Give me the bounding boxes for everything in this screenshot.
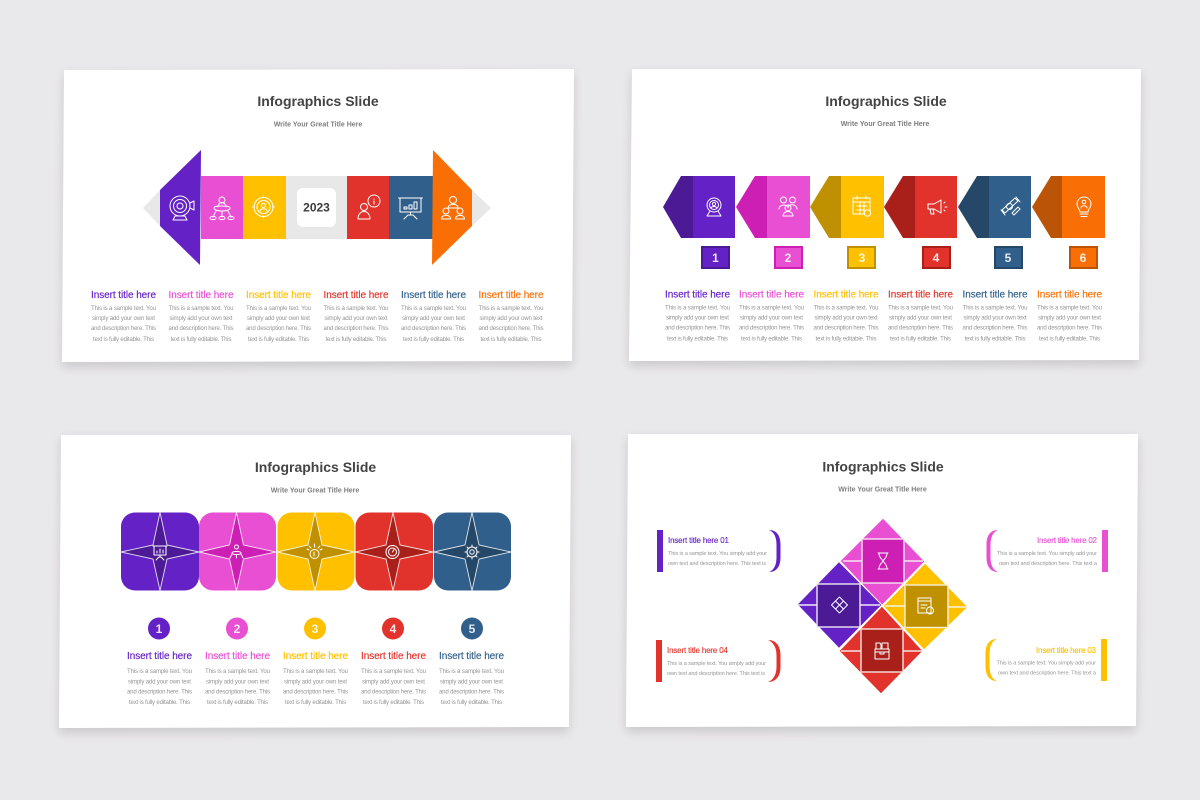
panel: slide 2 hexagon steps <box>629 69 1141 366</box>
callout 02: Insert title here 02 <box>1037 536 1098 545</box>
star tile 3 <box>278 512 354 590</box>
slide 2 column 6: text is fully editable. This <box>1039 336 1100 342</box>
slide 1 column 4: simply add your own text <box>324 315 388 322</box>
slide 2 column 3 <box>814 290 879 342</box>
slide 2 column 3: text is fully editable. This <box>816 336 876 342</box>
diamond quadrant: yellow <box>883 563 968 650</box>
step 5 arrow <box>958 176 1031 238</box>
icon: presentation board <box>398 198 422 219</box>
slide 2 column 1 <box>665 290 730 342</box>
icon: group of people <box>779 197 797 216</box>
slide 3 column 3 <box>283 651 348 706</box>
number circle 1 <box>148 618 170 640</box>
slide 1 column 5: simply add your own text <box>402 315 465 322</box>
slide 1 column 1: simply add your own text <box>92 315 155 322</box>
slide 3 column 5: Insert title here <box>439 651 504 662</box>
slide 2 column 4: simply add your own text <box>889 314 952 322</box>
slide 3 column 1: text is fully editable. This <box>129 699 190 706</box>
panel: slide 4 diamond <box>626 434 1138 732</box>
callout 03: own text and description here. This text a <box>998 670 1097 676</box>
number badge 4: 4 <box>933 251 940 265</box>
slide 1 column 6: and description here. This <box>478 325 544 332</box>
slide 3 column 4: simply add your own text <box>362 678 425 686</box>
slide 1 background <box>62 69 574 362</box>
callout 02: own text and description here. This text a <box>999 561 1098 567</box>
slide 1 column 4: and description here. This <box>324 325 388 332</box>
step 4 arrow <box>884 176 957 238</box>
icon: hourglass <box>878 553 888 569</box>
slide 1 column 5 <box>401 290 466 343</box>
icon: target camera <box>170 196 194 220</box>
star tile 2 <box>199 512 276 590</box>
slide 3 subtitle: Write Your Great Title Here <box>271 488 359 494</box>
slide 1 column 3: and description here. This <box>246 325 311 332</box>
diamond quadrant: pink <box>840 518 925 606</box>
slide 1 column 3: text is fully editable. This <box>248 336 309 343</box>
slide 4 subtitle: Write Your Great Title Here <box>838 486 927 494</box>
slide 1 column 3 <box>246 290 311 343</box>
star tile 1 <box>121 512 199 590</box>
number badge 6 <box>1070 247 1097 268</box>
slide 1 column 3: This is a sample text. You <box>246 305 311 312</box>
slide 1 column 6: text is fully editable. This <box>480 336 542 343</box>
slide 3 column 3: This is a sample text. You <box>283 668 348 675</box>
slide 3 background <box>59 435 571 728</box>
slide 2 column 6 <box>1037 290 1102 342</box>
slide 2 column 1: text is fully editable. This <box>667 336 728 342</box>
icon: document info <box>918 598 934 614</box>
slide 1 title: Infographics Slide <box>257 93 379 109</box>
slide 1 column 5: text is fully editable. This <box>403 336 464 343</box>
slide 1 column 3: Insert title here <box>246 290 311 301</box>
arrow timeline <box>143 150 491 265</box>
slide 2 column 3: and description here. This <box>814 324 878 332</box>
callout 02: This is a sample text. You simply add your <box>997 551 1097 557</box>
slide 3 column 3: and description here. This <box>283 688 348 696</box>
diamond quadrant: red <box>839 606 923 694</box>
slide 3 column 1: simply add your own text <box>128 678 191 686</box>
slide 1 column 2: simply add your own text <box>170 315 233 322</box>
number circle 1: 1 <box>156 622 163 636</box>
slide 1 column 4: Insert title here <box>324 290 389 301</box>
slide 3 column 4: Insert title here <box>361 651 426 662</box>
icon: megaphone <box>928 200 947 214</box>
slide 1 column 2: and description here. This <box>168 325 234 332</box>
step 6 arrow <box>1032 176 1105 238</box>
icon: hierarchy person <box>210 197 234 220</box>
callout 04: Insert title here 04 <box>667 646 729 655</box>
callout 03 <box>986 639 1107 681</box>
callout 02 <box>986 530 1108 572</box>
slide 1 column 1 <box>91 290 156 343</box>
icon: gear <box>465 545 479 559</box>
slide 2 column 6: and description here. This <box>1037 324 1102 332</box>
number circle 3: 3 <box>312 622 319 636</box>
callout 04: own text and description here. This text is <box>667 671 765 677</box>
slide 3 column 2: simply add your own text <box>206 678 269 686</box>
slide 1 column 6: simply add your own text <box>480 315 543 322</box>
step 3 arrow <box>810 176 884 238</box>
panel: slide 3 star tiles <box>59 435 571 733</box>
slide 3 column 3: text is fully editable. This <box>285 699 346 706</box>
slide 1 column 2: text is fully editable. This <box>170 336 232 343</box>
slide 1 column 2: This is a sample text. You <box>168 305 234 312</box>
year badge <box>297 188 336 227</box>
icon: presentation <box>153 546 167 560</box>
callout 04: This is a sample text. You simply add your <box>667 661 766 667</box>
slide 2 column 4 <box>888 290 953 342</box>
slide 2 column 4: This is a sample text. You <box>888 304 953 312</box>
slide 3 column 3: simply add your own text <box>284 678 347 686</box>
icon: coin burst <box>307 544 322 558</box>
number circle 3 <box>304 618 326 640</box>
slide 2 column 5: This is a sample text. You <box>962 304 1028 312</box>
step 2 arrow <box>736 176 810 238</box>
slide 2 column 5 <box>962 290 1028 342</box>
icon: calendar clock <box>853 196 871 216</box>
slide 3 column 1: and description here. This <box>127 688 192 696</box>
diamond quadrant: purple <box>797 562 882 648</box>
slide 2 column 4: text is fully editable. This <box>890 336 951 342</box>
slide 2 column 2: This is a sample text. You <box>739 304 804 312</box>
slide 1 column 2: Insert title here <box>168 290 234 301</box>
slide 3 column 5: and description here. This <box>439 688 504 696</box>
callout 01: Insert title here 01 <box>668 536 730 545</box>
icon: pinwheel <box>832 597 848 613</box>
slide 1 column 6: This is a sample text. You <box>478 305 544 312</box>
icon: gauge <box>386 546 399 558</box>
number badge 6: 6 <box>1080 251 1087 265</box>
slide 2 column 3: This is a sample text. You <box>814 304 878 312</box>
slide 3 column 5: simply add your own text <box>440 678 503 686</box>
slide 3 title: Infographics Slide <box>255 459 376 475</box>
slide 2 background <box>629 69 1141 361</box>
slide 3 column 3: Insert title here <box>283 651 348 662</box>
slide 3 column 4: and description here. This <box>361 688 426 696</box>
slide 1 column 6: Insert title here <box>478 290 544 301</box>
slide 1 column 1: Insert title here <box>91 290 156 301</box>
slide 3 column 2: text is fully editable. This <box>207 699 268 706</box>
slide 3 column 5 <box>439 651 504 706</box>
number circle 5 <box>461 618 483 640</box>
icon: diploma <box>1001 197 1020 215</box>
slide 2 column 5: simply add your own text <box>964 314 1027 322</box>
number circle 4 <box>382 618 404 640</box>
slide 3 column 2 <box>205 651 270 706</box>
slide 2 column 4: and description here. This <box>888 324 953 332</box>
number badge 5 <box>995 247 1022 268</box>
number badge 2 <box>775 247 802 268</box>
slide 1 column 5: Insert title here <box>401 290 466 301</box>
slide 1 column 6 <box>478 290 544 343</box>
number badge 1: 1 <box>712 251 719 265</box>
year badge: 2023 <box>303 200 330 214</box>
callout 01 <box>657 530 780 572</box>
number badge 3: 3 <box>859 251 866 265</box>
star tile 4 <box>356 512 433 590</box>
number badge 2: 2 <box>785 251 792 265</box>
slide 2 column 1: simply add your own text <box>666 314 729 322</box>
panel: slide 1 arrow timeline <box>62 69 574 367</box>
icon: person target <box>252 196 274 218</box>
slide 2 column 4: Insert title here <box>888 290 953 300</box>
slide 2 column 6: This is a sample text. You <box>1037 304 1102 312</box>
slide 4 background <box>626 434 1138 727</box>
slide 2 column 6: simply add your own text <box>1038 314 1101 322</box>
number badge 3 <box>848 247 875 268</box>
number badge 4 <box>923 247 950 268</box>
number circle 2: 2 <box>234 622 241 636</box>
slide 3 column 2: This is a sample text. You <box>205 668 270 675</box>
slide 3 column 4: This is a sample text. You <box>361 668 426 675</box>
slide 2 column 2 <box>739 290 804 342</box>
slide 1 subtitle: Write Your Great Title Here <box>274 122 362 128</box>
slide 1 column 5: and description here. This <box>401 325 466 332</box>
callout 01: This is a sample text. You simply add your <box>668 551 767 557</box>
callout 03: This is a sample text. You simply add your <box>996 660 1096 666</box>
callout 01: own text and description here. This text is <box>668 561 766 567</box>
slide 4 title: Infographics Slide <box>822 458 944 474</box>
number badge 5: 5 <box>1005 251 1012 265</box>
slide 3 column 1: This is a sample text. You <box>127 668 192 675</box>
slide 2 column 3: Insert title here <box>814 290 879 300</box>
slide 3 column 5: This is a sample text. You <box>439 668 504 675</box>
number circle 5: 5 <box>469 622 476 636</box>
slide 3 column 4: text is fully editable. This <box>363 699 424 706</box>
icon: folder box <box>875 643 889 659</box>
icon: location target <box>707 198 721 216</box>
star tile 5 <box>434 512 511 590</box>
slide 1 column 2 <box>168 290 234 343</box>
slide 2 subtitle: Write Your Great Title Here <box>841 121 929 128</box>
slide 2 column 1: This is a sample text. You <box>665 304 730 312</box>
slide 3 column 4 <box>361 651 426 706</box>
slide 2 column 2: and description here. This <box>739 324 804 332</box>
slide 2 column 5: text is fully editable. This <box>964 336 1026 342</box>
slide 2 column 5: Insert title here <box>962 290 1028 300</box>
slide 2 column 2: text is fully editable. This <box>741 336 802 342</box>
number circle 4: 4 <box>390 622 397 636</box>
icon: hierarchy <box>230 545 243 558</box>
slide 1 column 1: text is fully editable. This <box>93 336 154 343</box>
slide 2 title: Infographics Slide <box>825 93 947 109</box>
slide 1 column 5: This is a sample text. You <box>401 305 466 312</box>
slide 1 column 4: This is a sample text. You <box>324 305 388 312</box>
slide 3 column 5: text is fully editable. This <box>441 699 502 706</box>
slide 2 column 1: Insert title here <box>665 290 730 300</box>
slide 3 column 1 <box>127 651 192 706</box>
callout 04 <box>656 640 780 682</box>
slide 1 column 3: simply add your own text <box>247 315 310 322</box>
slide 1 column 1: This is a sample text. You <box>91 305 156 312</box>
slide 3 column 2: and description here. This <box>205 688 270 696</box>
number badge 1 <box>702 247 729 268</box>
icon: person info <box>358 195 380 219</box>
slide 2 column 6: Insert title here <box>1037 290 1102 300</box>
slide 2 column 2: Insert title here <box>739 290 804 300</box>
slide 3 column 2: Insert title here <box>205 651 270 662</box>
slide 1 column 4 <box>324 290 389 343</box>
callout 03: Insert title here 03 <box>1036 646 1097 655</box>
icon: light bulb <box>1077 197 1091 216</box>
number circle 2 <box>226 618 248 640</box>
slide 2 column 1: and description here. This <box>665 324 730 332</box>
slide 1 column 1: and description here. This <box>91 325 156 332</box>
slide 2 column 3: simply add your own text <box>814 314 878 322</box>
icon: team <box>442 196 464 219</box>
slide 2 column 5: and description here. This <box>962 324 1028 332</box>
slide 1 column 4: text is fully editable. This <box>326 336 386 343</box>
step 1 arrow <box>663 176 735 238</box>
slide 3 column 1: Insert title here <box>127 651 192 662</box>
slide 2 column 2: simply add your own text <box>740 314 803 322</box>
